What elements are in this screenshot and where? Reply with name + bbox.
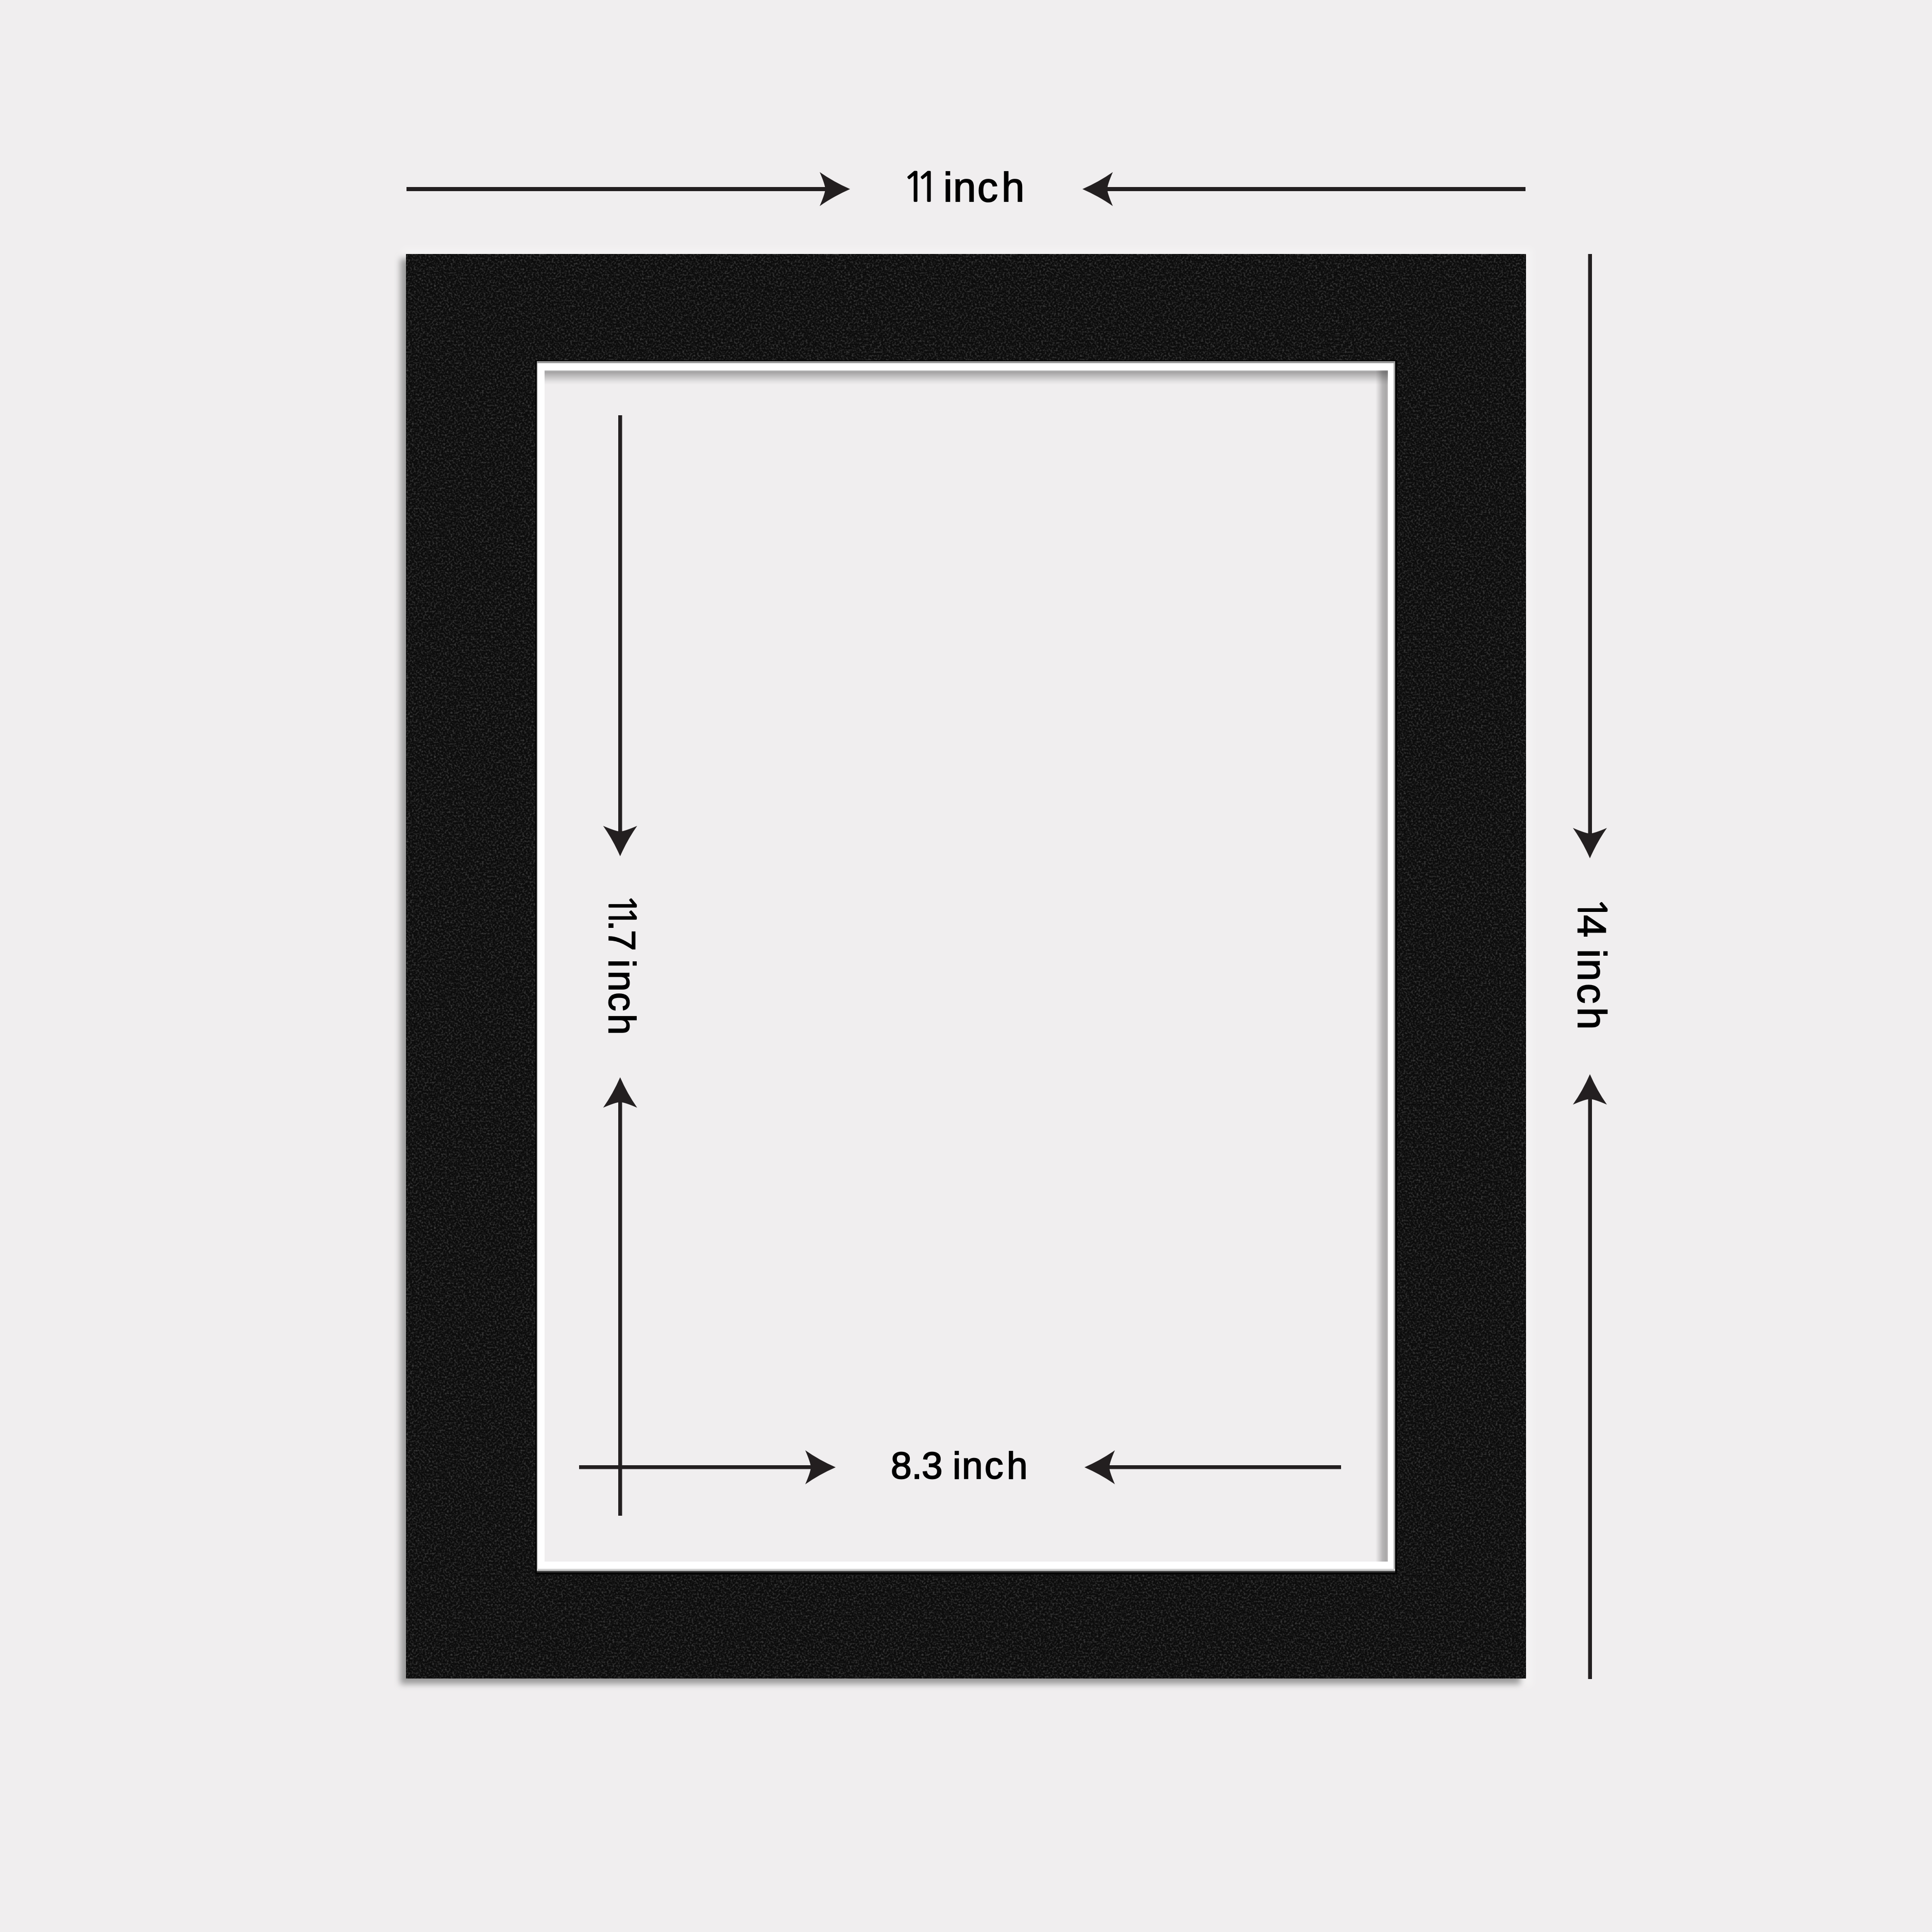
arrow: right segment pointing left (1082, 172, 1526, 206)
arrow: left segment pointing right (406, 172, 850, 206)
mat paper grain (406, 254, 1526, 1679)
arrow: right segment pointing left (1084, 1450, 1341, 1484)
dimension: print height 11.7 inch (601, 415, 642, 1516)
arrow: upper segment pointing down (603, 415, 637, 856)
label: 11 inch: 11 inch (902, 164, 1024, 210)
arrow: lower segment pointing up (603, 1077, 637, 1516)
label: 8.3 inch: 8.3 inch (891, 1445, 1028, 1487)
faint light halo around mat (403, 248, 1532, 1686)
dimension: outer height 14 inch (1569, 254, 1615, 1679)
arrow: left segment pointing right (579, 1450, 836, 1484)
white bevel of opening (537, 361, 1395, 1572)
inner top shadow (545, 370, 1388, 385)
label: 11.7 inch: 11.7 inch (601, 893, 642, 1035)
inner right shadow (1376, 370, 1388, 1562)
window opening (545, 370, 1388, 1562)
mat board (406, 254, 1526, 1679)
mat opening edge (535, 360, 1397, 1574)
arrow: lower segment pointing up (1573, 1074, 1607, 1679)
dimension: print width 8.3 inch (579, 1445, 1341, 1487)
arrow: upper segment pointing down (1573, 254, 1607, 858)
label: 14 inch: 14 inch (1569, 897, 1615, 1029)
panel: black photo mat (400, 248, 1532, 1686)
mat drop shadow (400, 259, 1520, 1684)
dimension: outer width 11 inch (406, 164, 1526, 210)
